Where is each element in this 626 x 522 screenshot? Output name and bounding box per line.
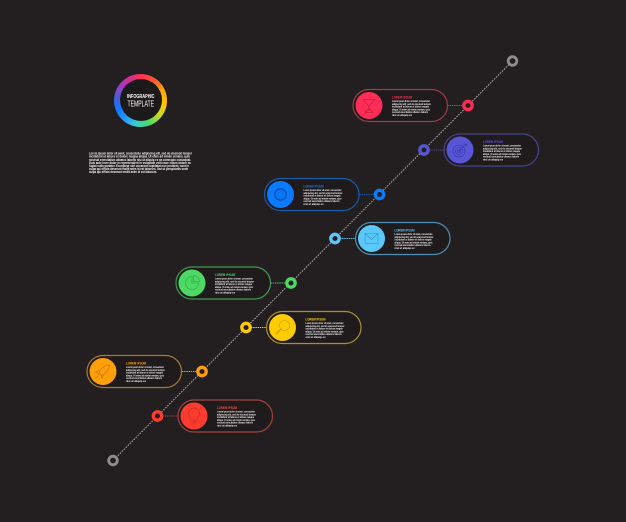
- step 6: blue, gear: Lorem ipsum dolor sit amet, consectetur: [304, 188, 342, 192]
- step 3: yellow, magnifier: LOREM IPSUM: [306, 318, 326, 322]
- step 1: red, light bulb: nostrud exercitation ullamco laboris: [217, 421, 253, 425]
- step 8: red pink, hourglass: incididunt ut labore et dolore magna: [392, 105, 429, 109]
- step 1: red, light bulb: adipiscing elit, sed do eiusmod tempor: [217, 412, 257, 416]
- logo ring: [114, 74, 167, 126]
- intro paragraph: Lorem ipsum dolor sit amet, consectetur adipiscing elit, sed do eiusmod tempor: [89, 151, 192, 156]
- intro paragraph: Duis aute irure dolor in reprehenderit in voluptate velit esse cillum dolore eu: [89, 160, 191, 165]
- logo title: [127, 94, 155, 108]
- step 7: purple, target: Lorem ipsum dolor sit amet, consectetur: [483, 144, 522, 148]
- step 1: red, light bulb: [153, 400, 272, 432]
- step 6: blue, gear: incididunt ut labore et dolore magna: [304, 194, 341, 198]
- step 4: green, pie chart: nisi ut aliquip ex: [215, 290, 235, 294]
- diagonal timeline line: [116, 64, 509, 458]
- step 8: red pink, hourglass: Lorem ipsum dolor sit amet, consectetur: [392, 99, 431, 103]
- intro paragraph: culpa qui officia deserunt mollit anim id est laborum. Sed ut perspiciatis unde: [89, 166, 189, 171]
- step 7: purple, target: aliqua. Ut enim ad minim veniam, quis: [483, 152, 521, 156]
- step 3: yellow, magnifier: aliqua. Ut enim ad minim veniam, quis: [306, 329, 344, 333]
- step 2: orange, rocket: nostrud exercitation ullamco laboris: [126, 376, 162, 380]
- step 7: purple, target: adipiscing elit, sed do eiusmod tempor: [483, 146, 523, 150]
- step 2: orange, rocket: incididunt ut labore et dolore magna: [126, 371, 163, 375]
- step 4: green, pie chart: incididunt ut labore et dolore magna: [215, 282, 252, 286]
- step 8: red pink, hourglass: aliqua. Ut enim ad minim veniam, quis: [392, 107, 430, 111]
- step 1: red, light bulb: nisi ut aliquip ex: [217, 424, 237, 428]
- step 3: yellow, magnifier: Lorem ipsum dolor sit amet, consectetur: [306, 321, 344, 325]
- step 4: green, pie chart: LOREM IPSUM: [215, 273, 235, 277]
- end node: [508, 57, 517, 65]
- intro paragraph: fugiat nulla pariatur. Excepteur sint occaecat cupidatat non proident, sunt in: [89, 163, 189, 168]
- step 3: yellow, magnifier: nisi ut aliquip ex: [306, 335, 326, 339]
- step 2: orange, rocket: Lorem ipsum dolor sit amet, consectetur: [126, 365, 165, 369]
- step 2: orange, rocket: LOREM IPSUM: [126, 362, 146, 366]
- step 7: purple, target: nisi ut aliquip ex: [483, 158, 503, 162]
- step 3: yellow, magnifier: [242, 312, 361, 344]
- step 3: yellow, magnifier: nostrud exercitation ullamco laboris: [306, 332, 342, 336]
- step 5: light blue, envelope: nisi ut aliquip ex: [394, 246, 415, 250]
- step 4: green, pie chart: nostrud exercitation ullamco laboris: [215, 288, 251, 292]
- step 5: light blue, envelope: aliqua. Ut enim ad minim veniam, quis: [394, 240, 433, 244]
- step 6: blue, gear: LOREM IPSUM: [304, 185, 324, 189]
- step 2: orange, rocket: aliqua. Ut enim ad minim veniam, quis: [126, 373, 164, 377]
- intro paragraph: nostrud exercitation ullamco laboris nisi ut aliquip ex ea commodo consequat.: [89, 157, 191, 162]
- step 5: light blue, envelope: [331, 222, 450, 254]
- step 3: yellow, magnifier: incididunt ut labore et dolore magna: [306, 327, 343, 331]
- step 1: red, light bulb: aliqua. Ut enim ad minim veniam, quis: [217, 418, 255, 422]
- step 7: purple, target: incididunt ut labore et dolore magna: [483, 149, 520, 153]
- step 3: yellow, magnifier: adipiscing elit, sed do eiusmod tempor: [306, 324, 345, 328]
- step 7: purple, target: nostrud exercitation ullamco laboris: [483, 155, 519, 159]
- step 4: green, pie chart: Lorem ipsum dolor sit amet, consectetur: [215, 276, 254, 280]
- step 1: red, light bulb: incididunt ut labore et dolore magna: [217, 415, 254, 419]
- step 6: blue, gear: adipiscing elit, sed do eiusmod tempor: [304, 191, 343, 195]
- step 6: blue, gear: aliqua. Ut enim ad minim veniam, quis: [304, 196, 342, 200]
- step 7: purple, target: [420, 134, 538, 166]
- step 5: light blue, envelope: adipiscing elit, sed do eiusmod tempor: [394, 235, 434, 239]
- step 8: red pink, hourglass: nostrud exercitation ullamco laboris: [392, 110, 428, 114]
- logo title: TEMPLATE: [128, 98, 154, 108]
- step 5: light blue, envelope: LOREM IPSUM: [394, 229, 414, 233]
- step 6: blue, gear: [264, 178, 384, 210]
- intro paragraph: incididunt ut labore et dolore magna aliqua. Ut enim ad minim veniam, quis: [89, 154, 190, 159]
- intro paragraph: [89, 151, 192, 174]
- step 7: purple, target: LOREM IPSUM: [483, 140, 503, 144]
- step 5: light blue, envelope: Lorem ipsum dolor sit amet, consectetur: [394, 232, 433, 236]
- step 1: red, light bulb: Lorem ipsum dolor sit amet, consectetur: [217, 410, 256, 414]
- step 5: light blue, envelope: nostrud exercitation ullamco laboris: [394, 243, 431, 247]
- step 4: green, pie chart: aliqua. Ut enim ad minim veniam, quis: [215, 285, 253, 289]
- logo title: INFOGRAPHIC: [127, 94, 155, 100]
- step 8: red pink, hourglass: [353, 90, 472, 122]
- step 2: orange, rocket: nisi ut aliquip ex: [126, 379, 146, 383]
- step 6: blue, gear: nisi ut aliquip ex: [304, 202, 324, 206]
- intro paragraph: culpa qui officia deserunt mollit anim id est laborum.: [89, 169, 157, 174]
- step 5: light blue, envelope: incididunt ut labore et dolore magna: [394, 238, 432, 242]
- step 8: red pink, hourglass: nisi ut aliquip ex: [392, 113, 412, 117]
- step 4: green, pie chart: [176, 267, 295, 299]
- step 1: red, light bulb: LOREM IPSUM: [217, 406, 237, 410]
- step 8: red pink, hourglass: LOREM IPSUM: [392, 96, 412, 100]
- start node: [109, 456, 117, 465]
- step 2: orange, rocket: adipiscing elit, sed do eiusmod tempor: [126, 368, 166, 372]
- step 2: orange, rocket: [87, 356, 206, 388]
- step 8: red pink, hourglass: adipiscing elit, sed do eiusmod tempor: [392, 102, 432, 106]
- step 6: blue, gear: nostrud exercitation ullamco laboris: [304, 199, 340, 203]
- step 4: green, pie chart: adipiscing elit, sed do eiusmod tempor: [215, 279, 255, 283]
